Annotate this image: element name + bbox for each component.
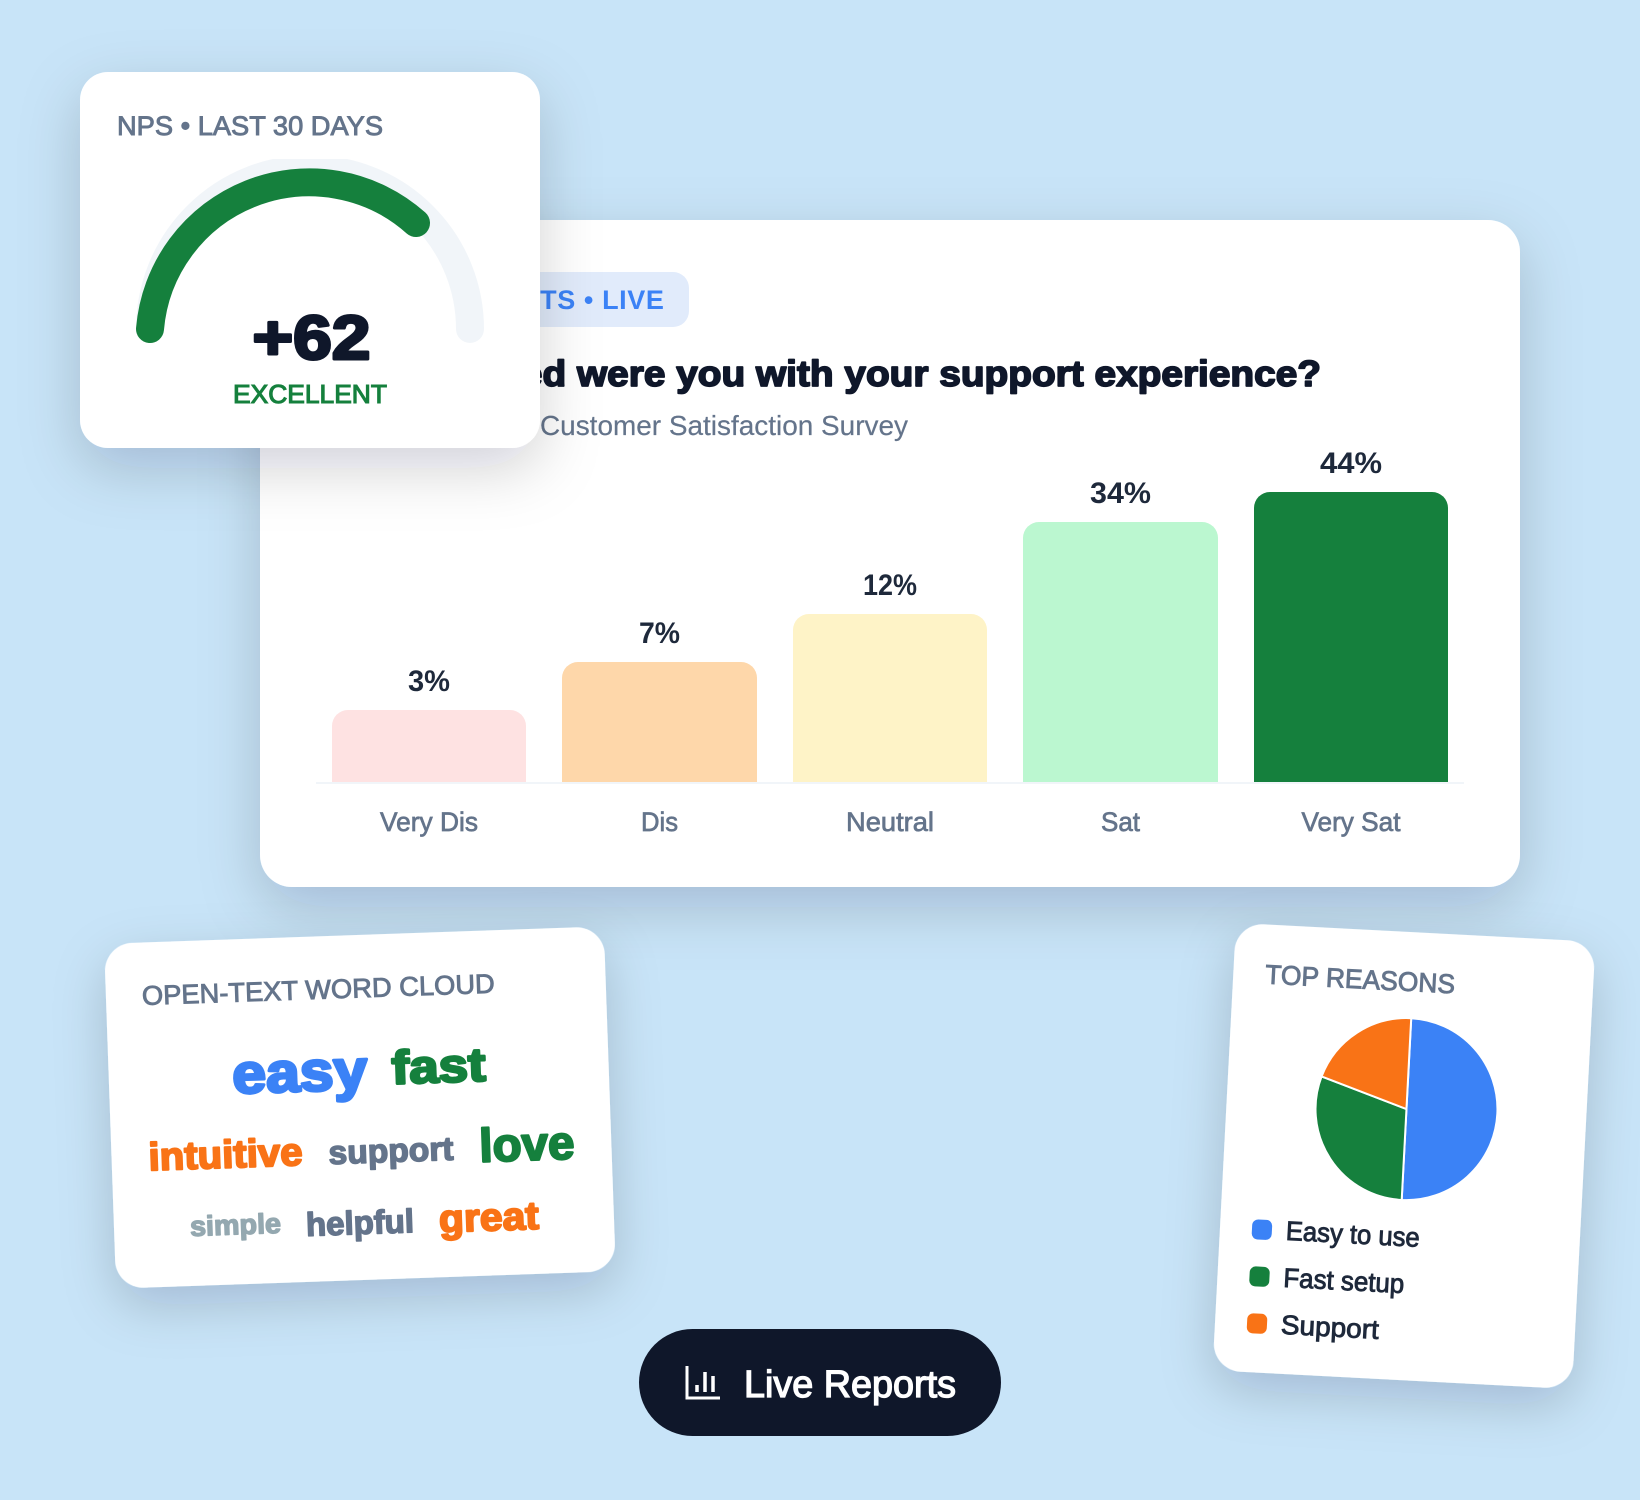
legend item: fast setup: Fast setup [1283,1263,1405,1299]
gauge track [150,169,470,329]
word: love: love [478,1116,575,1172]
pie chart [1311,1013,1502,1205]
bar: satisfied [1023,477,1218,837]
bar: dissatisfied: 7% [639,617,680,650]
icon: bar chart [687,1366,720,1398]
NPS score: +62 [252,304,370,373]
bar: dissatisfied: Dis [641,807,678,837]
word cloud card background [104,926,616,1289]
subtitle: Customer Satisfaction Survey [540,410,908,441]
bar: very dissatisfied [332,665,526,837]
main card background [260,220,1520,887]
word: easy: easy [231,1038,368,1105]
NPS rating: EXCELLENT [233,379,387,409]
word: intuitive: intuitive [148,1131,303,1179]
legend item: support: Support [1280,1310,1380,1345]
badge: reports live [316,272,689,327]
NPS card background [80,72,540,448]
legend [1246,1214,1421,1347]
word: support: support [328,1130,454,1171]
heading: survey question: How satisfied were you with your support experience? [316,353,1321,394]
panel: word cloud card [104,926,616,1289]
gauge value arc [150,182,416,329]
NPS card label: NPS • LAST 30 DAYS [117,111,383,141]
bar: very dissatisfied: Very Dis [380,807,478,837]
bar: very satisfied [1254,447,1448,837]
bar: neutral [793,569,987,837]
legend item: support [1246,1308,1380,1345]
panel: NPS gauge card [80,72,540,448]
top reasons card background [1213,923,1595,1389]
bar: very dissatisfied: 3% [408,665,450,698]
legend item: easy to use: Easy to use [1285,1216,1421,1253]
bar: satisfied: 34% [1090,477,1151,510]
word: great: great [438,1195,540,1241]
badge: reports live: REPORTS • LIVE [441,285,664,315]
word cloud label: OPEN-TEXT WORD CLOUD [141,969,495,1011]
top reasons label: TOP REASONS [1265,960,1456,999]
button label: Live Reports [744,1364,956,1406]
bar: satisfied: Sat [1101,807,1140,837]
word: simple: simple [189,1208,281,1242]
panel: main survey card [260,220,1520,887]
panel: top reasons card [1213,923,1595,1389]
bar: neutral: 12% [863,569,917,602]
bar: neutral: Neutral [846,807,934,837]
live reports button [639,1329,1001,1436]
bar: very satisfied: Very Sat [1302,807,1401,837]
word: helpful: helpful [305,1202,415,1243]
bar chart [316,447,1464,837]
word: fast: fast [391,1038,487,1094]
bar: dissatisfied [562,617,757,837]
bar: very satisfied: 44% [1320,447,1382,480]
